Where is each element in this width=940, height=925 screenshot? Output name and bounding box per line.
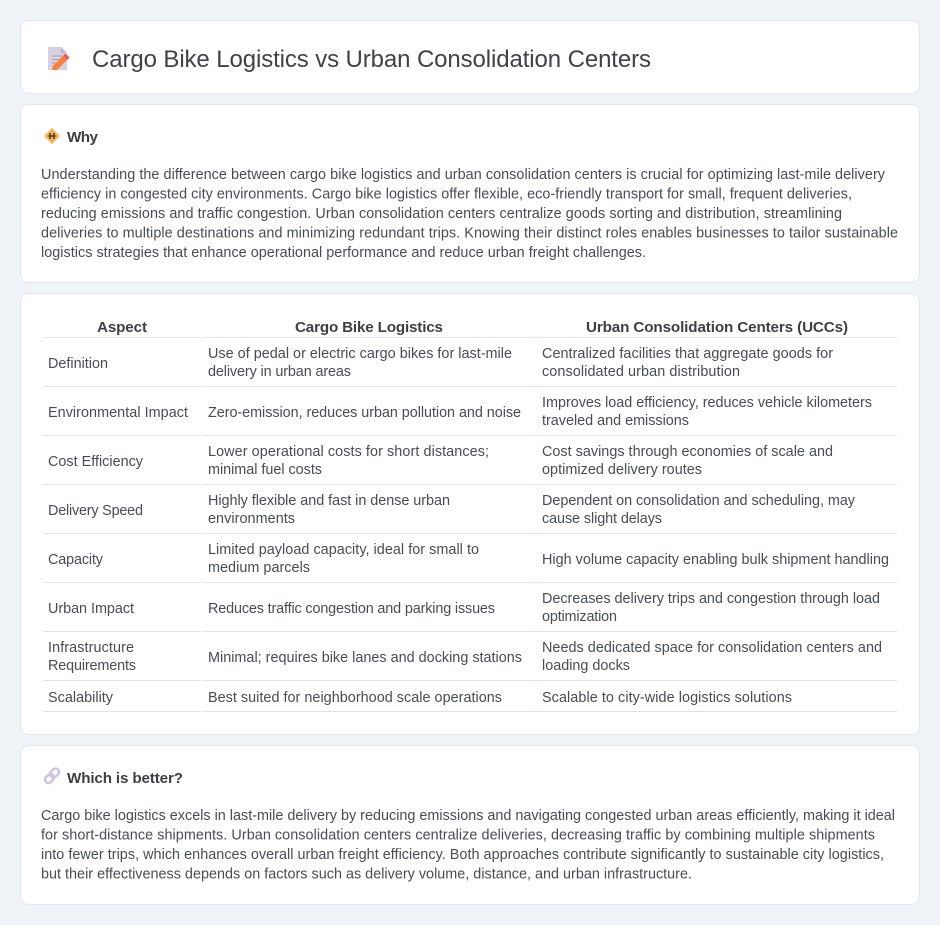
table row: urban impact: Urban Impact [48, 601, 134, 617]
table row: capacity [43, 542, 897, 583]
table header row [43, 319, 897, 338]
panel: header [20, 20, 920, 94]
table row: urban impact: Reduces traffic congestion and parking issues [208, 601, 495, 617]
table row: definition [43, 346, 897, 387]
table row: urban impact [43, 591, 897, 632]
table row: capacity: Limited payload capacity, ideal for small to [208, 542, 479, 558]
table row: delivery speed: cause slight delays [542, 511, 662, 527]
table row: delivery speed: Delivery Speed [48, 503, 143, 519]
table row: definition: delivery in urban areas [208, 364, 351, 380]
text block: why paragraph: logistics strategies that enhance operational performance and reduce urban freight challenges. [41, 245, 646, 261]
table row: infrastructure requirements: loading docks [542, 658, 630, 674]
icon: document with pencil [48, 47, 70, 70]
table row: cost efficiency: Lower operational costs for short distances; [208, 444, 489, 460]
table row: cost efficiency: optimized delivery routes [542, 462, 702, 478]
text block: which is better paragraph: but their effectiveness depends on factors such as delivery volume, distance, and urban infrastructure. [41, 866, 692, 882]
table row: definition: Use of pedal or electric cargo bikes for last-mile [208, 346, 512, 362]
icon: diamond road sign [44, 128, 60, 144]
table row: definition: Definition [48, 356, 108, 372]
table row: environmental impact: traveled and emissions [542, 413, 689, 429]
table row: infrastructure requirements: Requirements [48, 658, 136, 674]
table row: scalability: Scalability [48, 690, 114, 706]
table row: cost efficiency: Cost Efficiency [48, 454, 144, 470]
table row: delivery speed: Dependent on consolidation and scheduling, may [542, 493, 856, 509]
text block: why paragraph: Understanding the difference between cargo bike logistics and urban consolidation centers is crucial for optimizing last-mile delivery [41, 167, 886, 183]
table row: delivery speed [43, 493, 897, 534]
table row: definition: Centralized facilities that aggregate goods for [542, 346, 833, 362]
table row: scalability [43, 690, 897, 712]
panel: comparison table [20, 294, 920, 734]
text block: why paragraph: reducing emissions and traffic congestion. Urban consolidation centers centralize goods sorting and distribution, streamlining [41, 206, 842, 222]
table row: infrastructure requirements [43, 640, 897, 681]
table row: environmental impact: Improves load efficiency, reduces vehicle kilometers [542, 395, 872, 411]
table row: environmental impact: Zero-emission, reduces urban pollution and noise [208, 405, 521, 421]
text block: why paragraph [41, 167, 898, 261]
table row: delivery speed: environments [208, 511, 295, 527]
title: Cargo Bike Logistics vs Urban Consolidation Centers [92, 46, 651, 73]
text block: which is better paragraph: for short-distance shipments. Urban consolidation centers centralize deliveries, decreasing traffic by combining multiple shipments [41, 828, 875, 844]
text block: why paragraph: deliveries to multiple destinations and minimizing redundant trips. Knowing their distinct roles enables businesses to tailor sustainable [41, 226, 898, 242]
table row: capacity: High volume capacity enabling bulk shipment handling [542, 552, 889, 568]
text block: which is better paragraph: into fewer trips, which enhances overall urban freight efficiency. Both approaches contribute significantly to sustainable city logistics, [41, 847, 884, 863]
table row: scalability: Scalable to city-wide logistics solutions [542, 690, 792, 706]
icon: chain link [43, 767, 61, 785]
table row: environmental impact [43, 395, 897, 436]
table row: cost efficiency: minimal fuel costs [208, 462, 322, 478]
panel: why [20, 104, 920, 282]
table row: environmental impact: Environmental Impact [48, 405, 188, 421]
text block: which is better paragraph [41, 808, 895, 882]
table row: urban impact: optimization [542, 609, 617, 625]
table row: cost efficiency [43, 444, 897, 485]
text block: which is better paragraph: Cargo bike logistics excels in last-mile delivery by reducing emissions and navigating congested urban areas efficiently, making it ideal [41, 808, 895, 824]
table row: infrastructure requirements: Minimal; requires bike lanes and docking stations [208, 650, 522, 666]
table header row: Cargo Bike Logistics [295, 319, 443, 336]
heading: why: Why [67, 129, 99, 146]
table row: delivery speed: Highly flexible and fast in dense urban [208, 493, 450, 509]
table row: infrastructure requirements: Needs dedicated space for consolidation centers and [542, 640, 882, 656]
table row: capacity: Capacity [48, 552, 104, 568]
panel: which is better [20, 746, 920, 904]
table row: infrastructure requirements: Infrastructure [48, 640, 134, 656]
heading: which is better: Which is better? [67, 770, 183, 787]
table row: scalability: Best suited for neighborhood scale operations [208, 690, 502, 706]
table row: capacity: medium parcels [208, 560, 310, 576]
table row: cost efficiency: Cost savings through economies of scale and [542, 444, 833, 460]
table row: urban impact: Decreases delivery trips and congestion through load [542, 591, 880, 607]
table row: definition: consolidated urban distribution [542, 364, 740, 380]
text block: why paragraph: efficiency in congested city environments. Cargo bike logistics offer flexible, eco-friendly transport for small, frequent deliveries, [41, 186, 852, 202]
table header row: Urban Consolidation Centers (UCCs) [586, 319, 848, 336]
table header row: Aspect [97, 319, 147, 336]
